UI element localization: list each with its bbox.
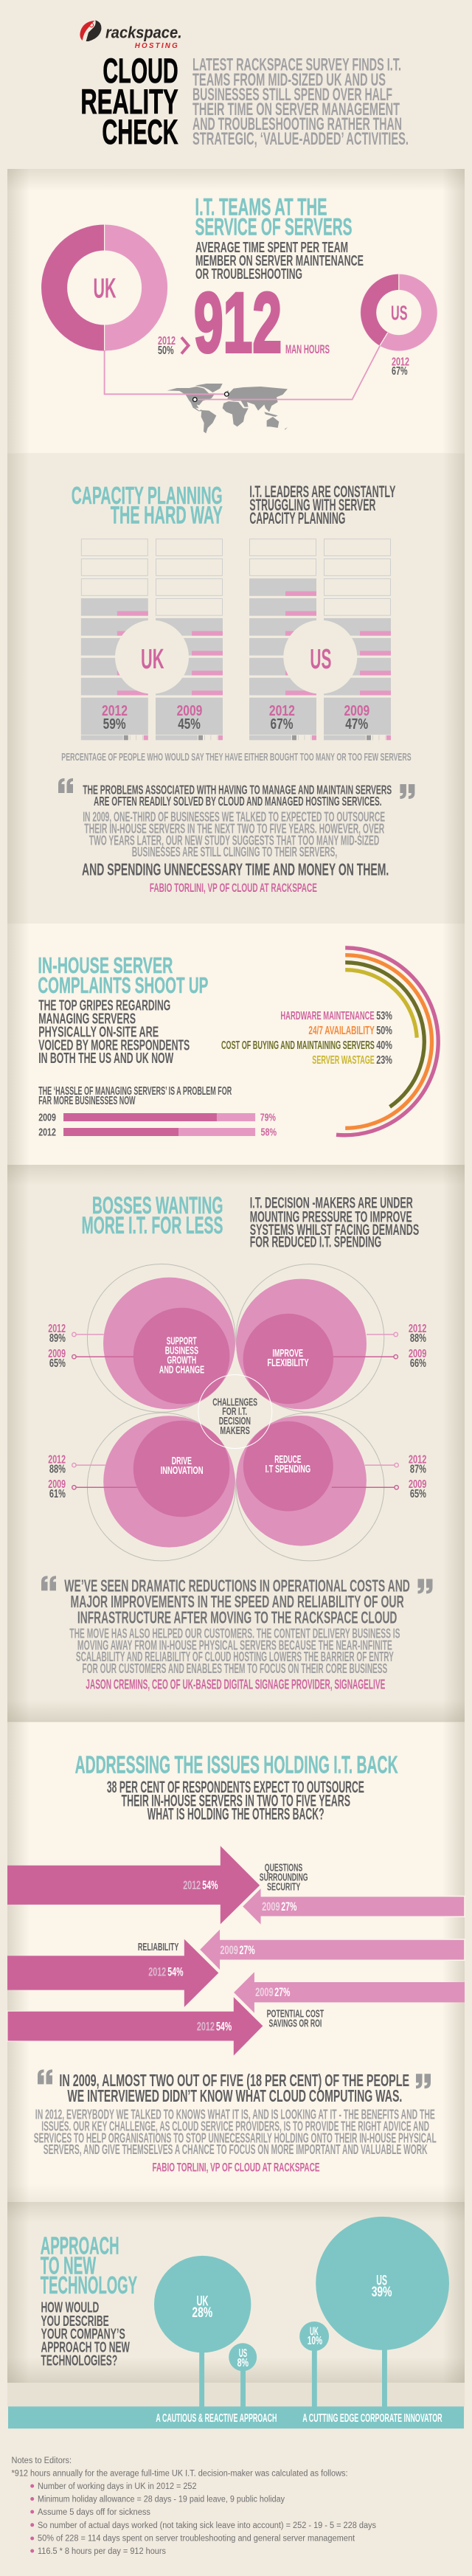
arc chart legend: 24/7 AVAILABILITY	[308, 1025, 375, 1037]
circle: support business growth and change: AND CHANGE	[159, 1365, 204, 1377]
notes to editors: So number of actual days worked (not taking sick leave into account) = 252 - 19 - 5 = 228 days	[38, 2521, 376, 2530]
title	[80, 51, 178, 151]
world map	[167, 384, 288, 433]
bubble: innovator UK 10%: 10%	[308, 2335, 322, 2347]
arc chart legend	[221, 1010, 392, 1067]
heading: TO NEW	[41, 2251, 97, 2279]
side values: 2012	[48, 1323, 66, 1335]
heading: IN-HOUSE SERVER	[38, 952, 173, 978]
notes to editors	[12, 2456, 376, 2556]
panel: in-house server complaints	[7, 924, 465, 1165]
question text: HOW WOULD	[41, 2299, 99, 2316]
notes to editors: Assume 5 days off for sickness	[38, 2508, 150, 2517]
arrow: cost savings 2009: 2009	[255, 1986, 274, 1999]
arrow: cost savings 2009	[234, 1972, 465, 2013]
arrow: reliability 2009	[199, 1928, 465, 1971]
intro text	[192, 55, 409, 149]
circle: support business growth and change: SUPPORT	[167, 1335, 196, 1347]
arrow: reliability 2012: 2012	[148, 1965, 166, 1978]
question text: YOU DESCRIBE	[41, 2313, 109, 2330]
side values: 2009	[409, 1478, 426, 1491]
heading: MORE I.T. FOR LESS	[82, 1212, 223, 1239]
circle: improve flexibility: FLEXIBILITY	[267, 1357, 309, 1369]
heading: APPROACH	[41, 2232, 119, 2259]
donut chart: UK	[41, 224, 167, 351]
panel: I.T. teams at the service of servers	[7, 169, 465, 453]
bubble: cautious US 8%: US	[239, 2347, 247, 2360]
centre circle: challenges: FOR I.T.	[222, 1406, 247, 1418]
quote block: FABIO TORLINI, VP OF CLOUD AT RACKSPACE	[150, 881, 317, 895]
arrow: security 2009	[242, 1887, 465, 1925]
panel: addressing the issues	[7, 1722, 465, 2202]
bar chart: 2009 vs 2012: 2009	[38, 1111, 56, 1123]
arrow: security 2012: 54%	[202, 1879, 218, 1892]
rack values: 67%	[270, 716, 294, 733]
US stat: 2012 67%	[392, 356, 409, 378]
quote block	[41, 1576, 432, 1692]
server rack chart: US 2009	[324, 539, 391, 740]
UK badge: UK	[141, 644, 164, 675]
rack values: 59%	[103, 716, 126, 733]
rack values: 2012	[102, 703, 128, 719]
bubble: innovator UK 10%: UK	[310, 2325, 319, 2338]
heading	[195, 194, 353, 240]
bar chart: 2009 vs 2012: 79%	[260, 1111, 276, 1123]
heading: I.T. TEAMS AT THE	[195, 194, 327, 221]
logo: rackspace hosting	[80, 20, 182, 50]
arrow: cost savings 2012: 2012	[197, 2020, 215, 2033]
centre circle: challenges: MAKERS	[220, 1425, 250, 1437]
bar chart: 2009 vs 2012: 2012	[38, 1126, 56, 1138]
leader lines	[72, 1332, 398, 1489]
subheading	[107, 1778, 364, 1824]
title: CLOUD	[103, 51, 178, 90]
side values: 2012	[409, 1453, 426, 1466]
arrow: cost savings 2009: 27%	[274, 1986, 291, 1999]
bar chart: 2009 vs 2012: 58%	[261, 1126, 277, 1138]
title: CHECK	[102, 112, 178, 151]
arrow: reliability 2009: 2009	[220, 1944, 238, 1957]
server rack chart: UK 2012	[81, 539, 148, 740]
bubble: innovator US 39%: 39%	[372, 2284, 392, 2300]
centre circle: challenges	[198, 1375, 272, 1449]
subheading: CAPACITY PLANNING	[249, 509, 345, 527]
question text	[41, 2299, 130, 2369]
heading	[41, 2232, 137, 2299]
arc chart legend: 50%	[376, 1025, 392, 1037]
question text: APPROACH TO NEW	[41, 2338, 130, 2356]
quote block: FABIO TORLINI, VP OF CLOUD AT RACKSPACE	[152, 2161, 320, 2175]
side values: 89%	[49, 1332, 66, 1345]
footer bar: A CAUTIOUS & REACTIVE APPROACH	[156, 2412, 277, 2425]
UK stat: 2012 50%	[158, 335, 189, 357]
notes to editors: 50% of 228 = 114 days spent on server troubleshooting and general server management	[38, 2535, 355, 2544]
circle: support business growth and change: GROWTH	[167, 1355, 196, 1367]
circle: support business growth and change: BUSINESS	[165, 1346, 198, 1357]
quote block	[34, 2069, 437, 2175]
arrow: security 2012: 2012	[183, 1879, 201, 1892]
subheading	[195, 240, 364, 283]
arrow: security 2009: 2009	[262, 1900, 280, 1914]
US badge: US	[310, 644, 331, 675]
bubble: cautious UK 28%	[154, 2256, 251, 2407]
rack values: 47%	[345, 716, 368, 733]
server rack chart: US 2012	[249, 539, 316, 740]
body text	[38, 997, 190, 1067]
label: potential cost savings: SAVINGS OR ROI	[268, 2018, 322, 2030]
side values: 2009	[409, 1348, 426, 1360]
heading	[82, 1192, 223, 1239]
arrow: reliability 2012: 54%	[167, 1965, 184, 1978]
side values: 87%	[410, 1463, 426, 1475]
connector lines	[105, 345, 381, 400]
label: potential cost savings: POTENTIAL COST	[267, 2008, 324, 2021]
US stat: 2012 67%: 67%	[392, 365, 408, 378]
notes to editors: Minimum holiday allowance = 28 days - 19 paid leave, 9 public holiday	[38, 2495, 285, 2504]
circle: improve flexibility: IMPROVE	[272, 1348, 303, 1360]
circle: support business growth and change	[103, 1278, 235, 1409]
arc chart legend: 23%	[376, 1054, 392, 1067]
bubble: cautious UK 28%: 28%	[192, 2305, 212, 2321]
circle: drive innovation: INNOVATION	[161, 1465, 204, 1477]
rack values: 45%	[178, 716, 201, 733]
rack values	[102, 703, 369, 733]
radial arcs chart	[336, 948, 438, 1135]
outline circles	[87, 1264, 384, 1561]
big number: 912 man hours: 912	[194, 276, 282, 370]
bar chart intro: FAR MORE BUSINESSES NOW	[38, 1095, 136, 1107]
US stat: 2012 67%: 2012	[392, 356, 409, 369]
heading	[72, 482, 223, 528]
body text: THE TOP GRIPES REGARDING	[38, 997, 170, 1014]
subheading: OR TROUBLESHOOTING	[195, 266, 302, 283]
quote block	[58, 778, 414, 895]
side values: 2012	[48, 1453, 66, 1466]
arrow: security 2012	[7, 1846, 260, 1924]
side values	[48, 1323, 426, 1500]
heading: THE HARD WAY	[111, 501, 223, 528]
circle: reduce I.T. spending	[236, 1416, 367, 1546]
heading: BOSSES WANTING	[92, 1192, 223, 1219]
donut chart: US	[361, 274, 437, 351]
bubble: innovator US 39%	[316, 2217, 449, 2407]
subheading: WHAT IS HOLDING THE OTHERS BACK?	[148, 1804, 324, 1824]
rack values: 2012	[269, 703, 295, 719]
side values: 2009	[48, 1348, 66, 1360]
subheading: STRUGGLING WITH SERVER	[249, 496, 375, 514]
logo: rackspace hosting: rackspace.	[105, 24, 182, 42]
label: questions surrounding security: SURROUNDING	[260, 1871, 308, 1884]
body text: PHYSICALLY ON-SITE ARE	[38, 1024, 159, 1041]
question text: YOUR COMPANY’S	[41, 2326, 125, 2343]
centre circle: challenges: DECISION	[219, 1416, 251, 1427]
subheading: MEMBER ON SERVER MAINTENANCE	[195, 253, 364, 269]
label: potential cost savings	[267, 2008, 324, 2030]
heading	[38, 952, 208, 998]
panel: bosses wanting more I.T. for less	[7, 1165, 465, 1722]
side values: 61%	[49, 1488, 66, 1500]
side values: 65%	[49, 1357, 66, 1370]
header	[80, 20, 409, 151]
panel: capacity planning	[7, 453, 465, 924]
bar chart intro	[38, 1085, 232, 1107]
subheading: AVERAGE TIME SPENT PER TEAM	[195, 240, 348, 256]
arrow: security 2009: 27%	[281, 1900, 297, 1914]
arrow: reliability 2012	[7, 1939, 218, 2007]
heading: CAPACITY PLANNING	[72, 482, 223, 509]
arrow: reliability 2009: 27%	[239, 1944, 255, 1957]
label: questions surrounding security: SECURITY	[267, 1881, 300, 1893]
arc chart legend: 53%	[376, 1010, 392, 1022]
label: questions surrounding security: QUESTIONS	[265, 1861, 302, 1874]
rack values: 2009	[177, 703, 202, 719]
bubble: innovator UK 10%	[299, 2321, 329, 2407]
label: questions surrounding security	[260, 1861, 308, 1893]
location dots	[193, 392, 229, 401]
side values: 65%	[410, 1488, 426, 1500]
circle: reduce I.T. spending: REDUCE	[274, 1454, 302, 1466]
panel: approach to new technology	[7, 2202, 465, 2428]
UK badge	[115, 620, 189, 694]
donut chart: UK: UK	[93, 274, 117, 305]
notes to editors: 116.5 * 8 hours per day = 912 hours	[38, 2547, 166, 2556]
notes to editors: Notes to Editors:	[12, 2456, 72, 2465]
bar chart intro: THE ‘HASSLE OF MANAGING SERVERS’ IS A PROBLEM FOR	[38, 1085, 232, 1098]
question text: TECHNOLOGIES?	[41, 2352, 117, 2369]
label: reliability: RELIABILITY	[138, 1941, 178, 1953]
arc chart legend: 40%	[376, 1039, 392, 1052]
title: REALITY	[80, 82, 178, 121]
side values: 88%	[410, 1332, 426, 1345]
rack values: 2009	[344, 703, 369, 719]
centre circle: challenges: CHALLENGES	[212, 1396, 257, 1408]
UK stat: 2012 50%: 2012	[158, 335, 176, 347]
side values: 2009	[48, 1478, 66, 1491]
circle: drive innovation: DRIVE	[172, 1455, 192, 1467]
logo: rackspace hosting: HOSTING	[135, 42, 178, 50]
big number: 912 man hours: MAN HOURS	[285, 342, 330, 356]
bubble: cautious US 8%: 8%	[237, 2357, 249, 2369]
side values: 88%	[49, 1463, 66, 1475]
circle: improve flexibility	[236, 1279, 367, 1409]
body text: MANAGING SERVERS	[38, 1011, 136, 1028]
arc chart legend: HARDWARE MAINTENANCE	[280, 1010, 375, 1022]
heading: SERVICE OF SERVERS	[195, 213, 353, 240]
notes to editors: Number of working days in UK in 2012 = 252	[38, 2482, 196, 2491]
heading: COMPLAINTS SHOOT UP	[38, 972, 208, 998]
arrow: cost savings 2012: 54%	[216, 2020, 232, 2033]
bubble: innovator US 39%: US	[376, 2272, 387, 2288]
subheading	[249, 482, 396, 527]
circle: drive innovation	[103, 1416, 235, 1548]
donut chart: US: US	[391, 302, 407, 325]
arc chart legend: SERVER WASTAGE	[312, 1054, 375, 1067]
server rack chart: UK 2009	[156, 539, 223, 740]
bubble: cautious UK 28%: UK	[196, 2293, 208, 2309]
arrow: cost savings 2012	[7, 1996, 263, 2057]
body text: IN BOTH THE US AND UK NOW	[38, 1050, 174, 1067]
US badge	[283, 620, 357, 694]
bubble: cautious US 8%	[229, 2343, 257, 2407]
footer bar	[8, 2406, 464, 2428]
side values: 2012	[409, 1323, 426, 1335]
notes to editors: *912 hours annually for the average full-time UK I.T. decision-maker was calculated as follows:	[12, 2470, 348, 2479]
side values: 66%	[410, 1357, 426, 1370]
body text: VOICED BY MORE RESPONDENTS	[38, 1036, 190, 1053]
subheading	[250, 1194, 419, 1251]
UK stat: 2012 50%: 50%	[158, 344, 174, 357]
circle: reduce I.T. spending: I.T SPENDING	[266, 1464, 310, 1475]
heading: TECHNOLOGY	[41, 2271, 137, 2299]
bar chart: 2009 vs 2012	[38, 1111, 277, 1138]
